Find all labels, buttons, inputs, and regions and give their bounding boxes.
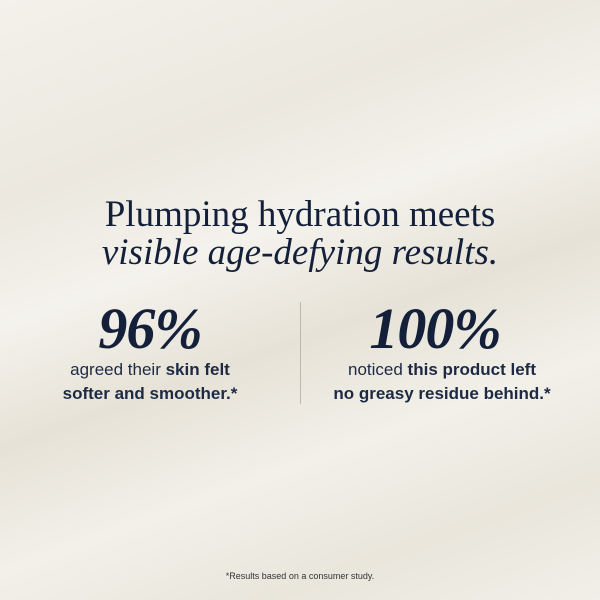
heading: Plumping hydration meets	[105, 194, 495, 235]
stat: 96%	[63, 296, 238, 403]
heading	[102, 194, 498, 273]
number 100%: 100%	[369, 296, 501, 361]
caption left: softer and smoother.*	[63, 384, 237, 403]
caption left: agreed their skin felt	[70, 360, 230, 379]
number 96%: 96%	[98, 296, 202, 361]
caption left	[63, 360, 238, 403]
caption right	[333, 360, 551, 403]
heading: visible age-defying results.	[102, 232, 498, 273]
divider	[300, 302, 301, 404]
stat: 100%	[333, 296, 551, 403]
caption right: noticed this product left	[348, 360, 536, 379]
footnote: *Results based on a consumer study.	[226, 571, 374, 581]
caption right: no greasy residue behind.*	[333, 384, 551, 403]
